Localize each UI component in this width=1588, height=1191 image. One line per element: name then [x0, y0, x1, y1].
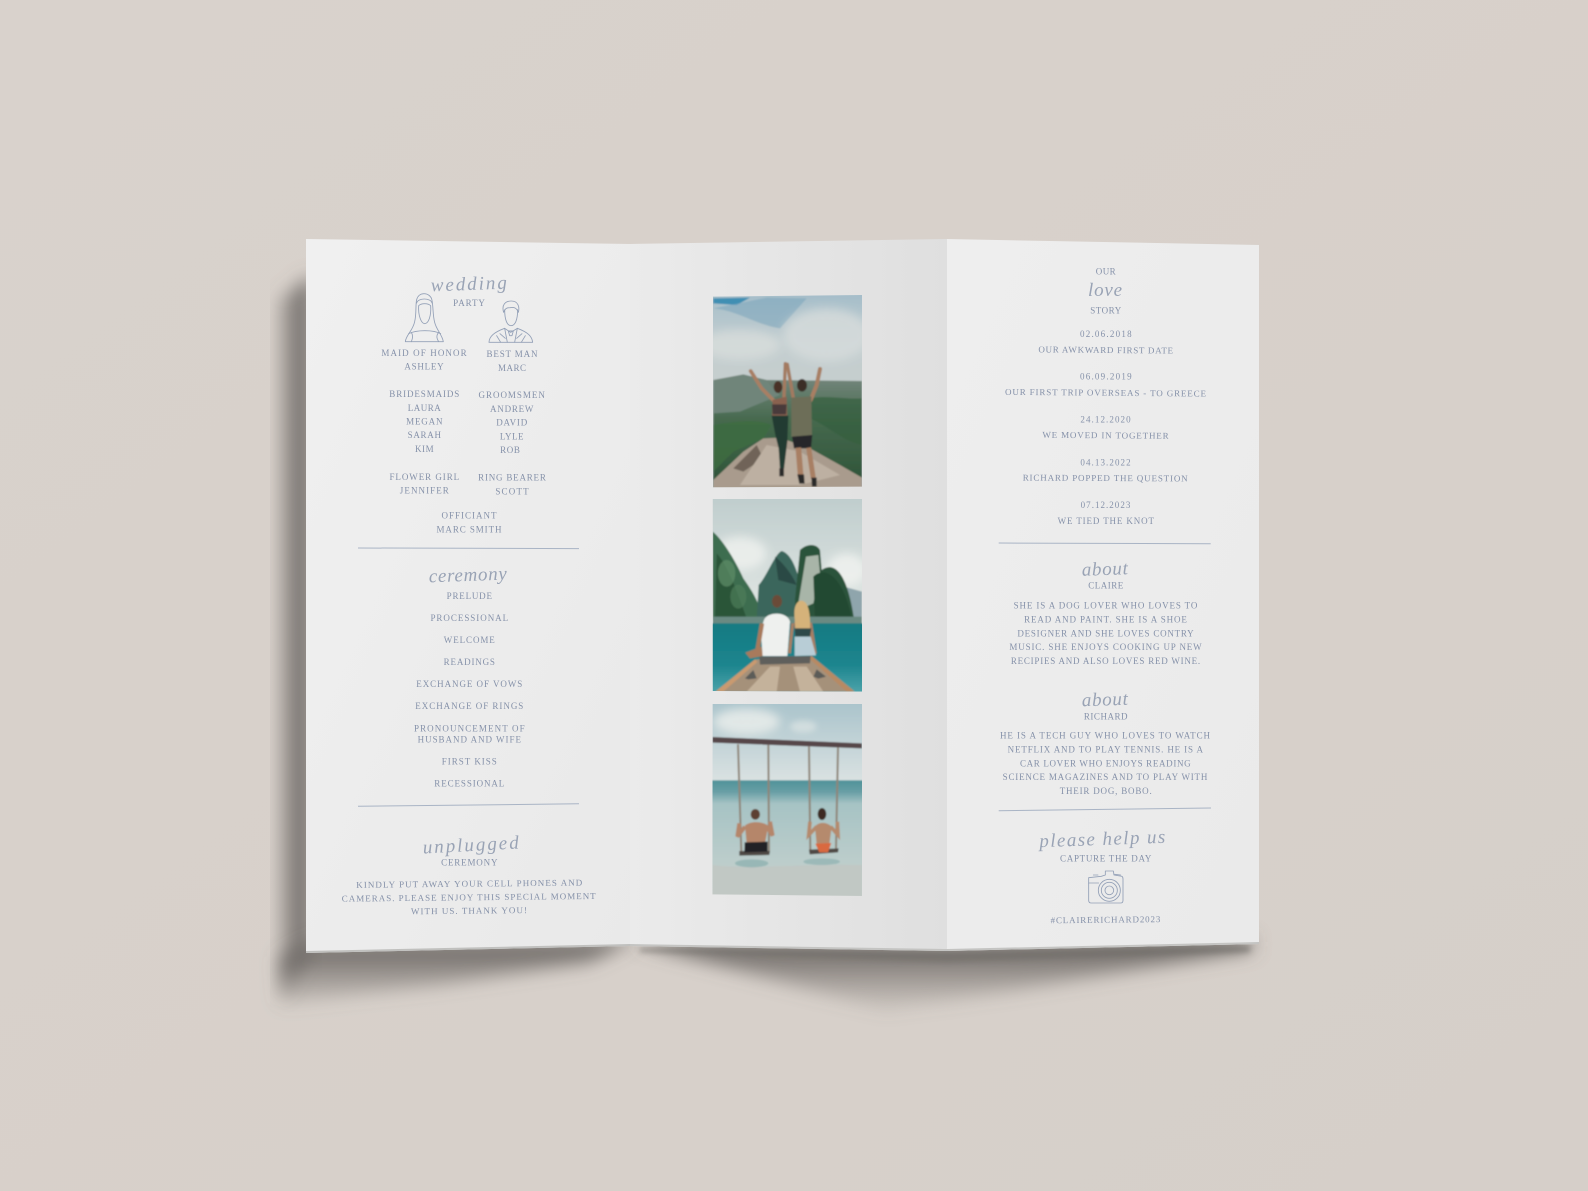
about richard: THEIR DOG, BOBO.: [1060, 786, 1152, 796]
bridesmaids list: LAURA: [408, 403, 441, 413]
heading: unplugged ceremony: unplugged: [422, 832, 520, 859]
officiant text: [436, 511, 502, 534]
ring bearer text: RING BEARER: [478, 473, 546, 483]
about richard: RICHARD: [1084, 711, 1128, 721]
ring bearer text: [478, 473, 546, 497]
bridesmaids list: SARAH: [408, 430, 441, 440]
flower girl text: JENNIFER: [400, 486, 449, 496]
about claire: READ AND PAINT. SHE IS A SHOE: [1024, 615, 1187, 625]
groomsmen list: LYLE: [500, 432, 524, 442]
maid of honor text: ASHLEY: [404, 362, 444, 372]
icon: groom: [489, 301, 533, 342]
panel: photo strip (centre): [630, 239, 947, 951]
ceremony order list: PROCESSIONAL: [430, 613, 508, 623]
icon: bride: [405, 294, 443, 342]
heading: unplugged ceremony: CEREMONY: [441, 858, 498, 868]
groomsmen list: ANDREW: [490, 404, 534, 414]
unplugged note: CAMERAS. PLEASE ENJOY THIS SPECIAL MOMENT: [342, 891, 596, 904]
officiant text: MARC SMITH: [436, 524, 502, 534]
unplugged note: [342, 878, 596, 916]
best man text: [486, 349, 538, 373]
about richard: [1000, 689, 1210, 796]
heading: our love story: OUR: [1096, 266, 1116, 276]
about claire: [1009, 558, 1202, 666]
panel: wedding party and ceremony (left): [306, 239, 630, 953]
panel: love story and about (right): [947, 239, 1259, 951]
ceremony order list: HUSBAND AND WIFE: [418, 734, 521, 744]
timeline: WE TIED THE KNOT: [1058, 516, 1154, 526]
ceremony order list: PRELUDE: [447, 591, 492, 601]
bridesmaids list: MEGAN: [406, 417, 443, 427]
about richard: HE IS A TECH GUY WHO LOVES TO WATCH: [1000, 731, 1210, 741]
heading: our love story: [1088, 266, 1122, 315]
groomsmen list: DAVID: [496, 418, 528, 428]
timeline: 06.09.2019: [1080, 372, 1132, 382]
heading: please help us: please help us: [1037, 827, 1166, 852]
icon: camera: [1089, 871, 1123, 903]
best man text: MARC: [498, 363, 526, 373]
heading: wedding party: [430, 273, 507, 308]
about claire: CLAIRE: [1088, 580, 1124, 590]
about claire: DESIGNER AND SHE LOVES CONTRY: [1017, 628, 1194, 638]
maid of honor text: [381, 348, 467, 372]
bridesmaids list: [389, 389, 459, 454]
heading: please help us: CAPTURE THE DAY: [1060, 854, 1152, 864]
ceremony order list: FIRST KISS: [442, 756, 497, 766]
unplugged note: KINDLY PUT AWAY YOUR CELL PHONES AND: [356, 878, 583, 890]
ceremony order list: RECESSIONAL: [434, 778, 504, 788]
hashtag: #CLAIRERICHARD2023: [1051, 914, 1161, 925]
about richard: NETFLIX AND TO PLAY TENNIS. HE IS A: [1008, 745, 1203, 755]
photo: couple on beach swings: [710, 702, 867, 897]
timeline: 07.12.2023: [1081, 500, 1131, 510]
heading: please help us: [1037, 827, 1166, 864]
ring bearer text: SCOTT: [495, 487, 529, 497]
best man text: BEST MAN: [486, 349, 538, 359]
timeline: 04.13.2022: [1080, 457, 1131, 467]
timeline: [1005, 329, 1207, 526]
heading: ceremony: ceremony: [428, 564, 508, 587]
timeline: WE MOVED IN TOGETHER: [1042, 430, 1169, 441]
about richard: about: [1081, 689, 1129, 711]
groomsmen list: GROOMSMEN: [479, 390, 545, 400]
groomsmen list: [479, 390, 545, 455]
timeline: 24.12.2020: [1080, 414, 1131, 424]
ceremony order list: PRONOUNCEMENT OF: [414, 723, 525, 733]
heading: our love story: love: [1088, 280, 1122, 301]
groomsmen list: ROB: [500, 445, 520, 455]
bridesmaids list: KIM: [415, 444, 434, 454]
about claire: SHE IS A DOG LOVER WHO LOVES TO: [1014, 601, 1198, 611]
ceremony order list: READINGS: [444, 657, 495, 667]
bridesmaids list: BRIDESMAIDS: [389, 389, 459, 399]
ceremony order list: EXCHANGE OF VOWS: [416, 679, 522, 689]
about claire: MUSIC. SHE ENJOYS COOKING UP NEW: [1009, 642, 1202, 652]
unplugged note: WITH US. THANK YOU!: [411, 905, 527, 916]
about richard: CAR LOVER WHO ENJOYS READING: [1020, 758, 1191, 768]
ceremony order list: EXCHANGE OF RINGS: [415, 701, 523, 711]
heading: wedding party: PARTY: [453, 298, 485, 308]
timeline: OUR AWKWARD FIRST DATE: [1038, 344, 1174, 356]
about claire: about: [1081, 558, 1129, 581]
paper shadow: [280, 275, 1252, 1010]
heading: wedding party: wedding: [430, 273, 507, 296]
maid of honor text: MAID OF HONOR: [381, 348, 467, 358]
ceremony order list: [414, 591, 525, 788]
photo: couple on mountain: [713, 295, 862, 488]
officiant text: OFFICIANT: [442, 511, 497, 521]
photo: couple on longtail boat: [710, 497, 867, 693]
timeline: 02.06.2018: [1080, 329, 1132, 339]
flower girl text: FLOWER GIRL: [389, 472, 459, 482]
flower girl text: [389, 472, 459, 496]
ceremony order list: WELCOME: [444, 635, 495, 645]
timeline: RICHARD POPPED THE QUESTION: [1023, 473, 1188, 483]
about claire: RECIPIES AND ALSO LOVES RED WINE.: [1011, 656, 1200, 666]
heading: our love story: STORY: [1090, 305, 1122, 315]
timeline: OUR FIRST TRIP OVERSEAS - TO GREECE: [1005, 387, 1207, 399]
about richard: SCIENCE MAGAZINES AND TO PLAY WITH: [1003, 772, 1208, 782]
